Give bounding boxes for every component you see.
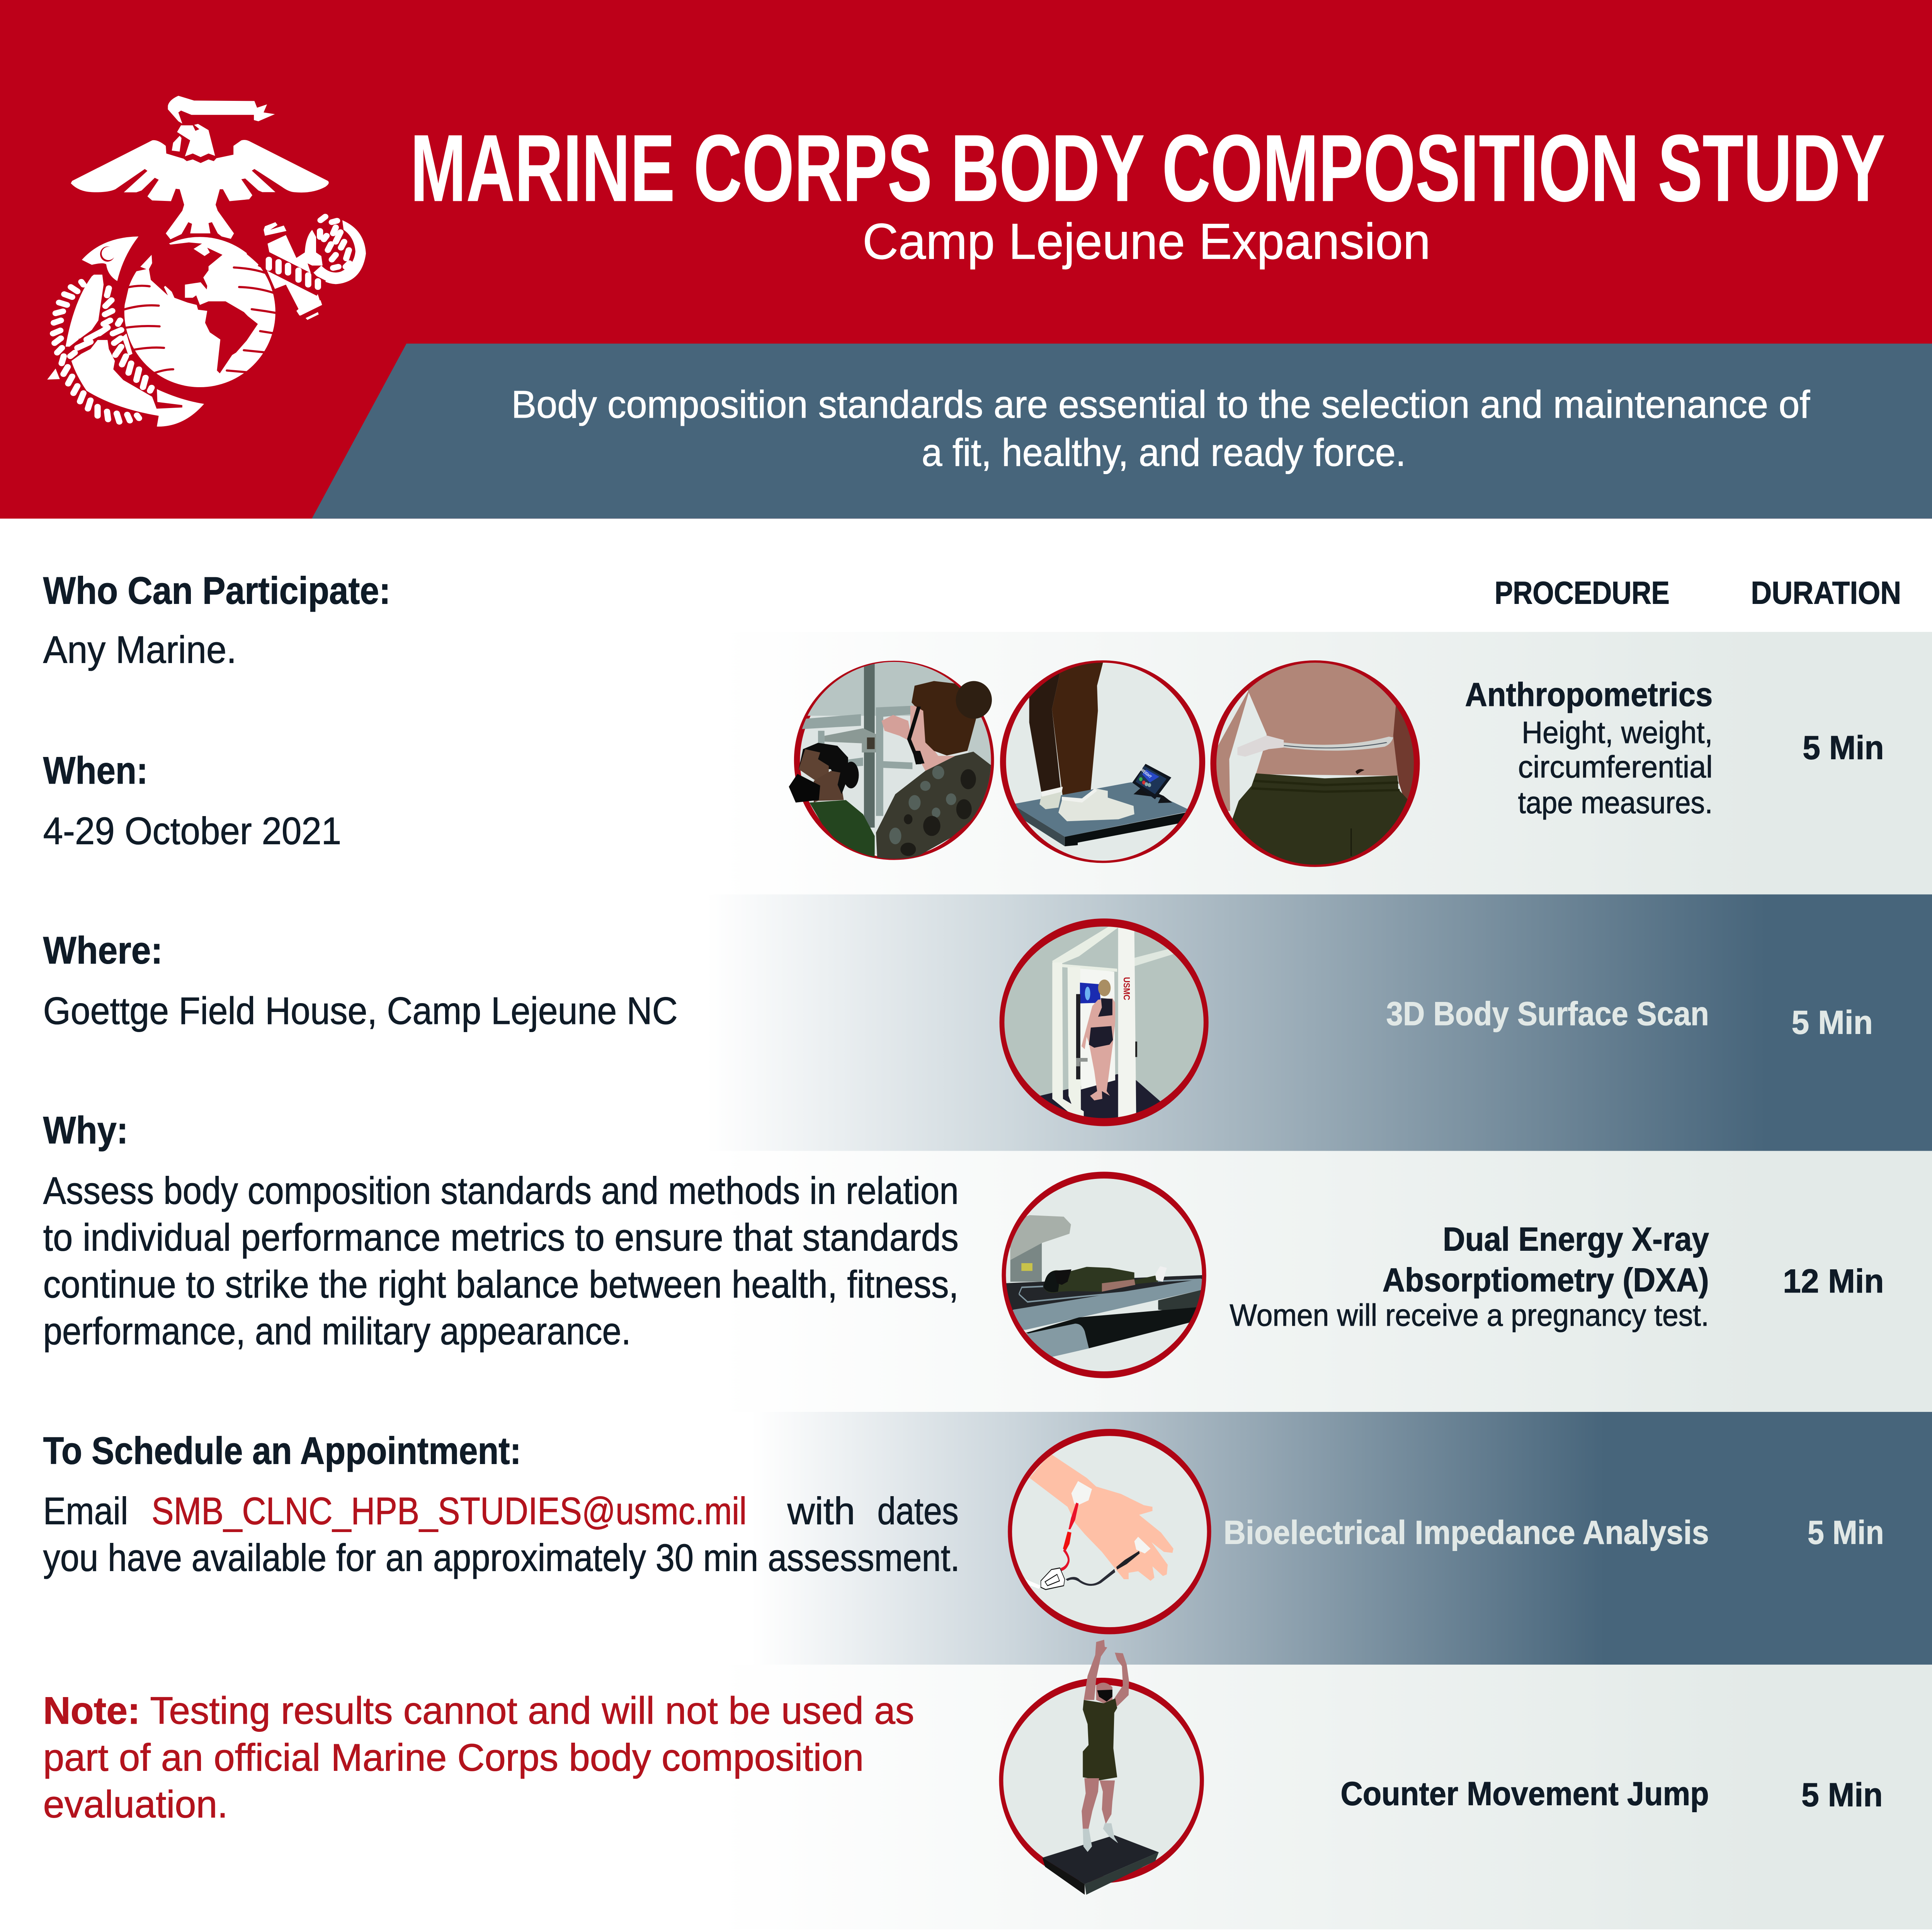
table header: duration: DURATION	[1751, 575, 1901, 611]
when: When:	[43, 749, 148, 792]
appointment scheduling: with	[787, 1490, 855, 1532]
panel: bioelectrical row	[0, 1412, 1932, 1665]
when: 4-29 October 2021	[43, 810, 341, 852]
summary statement: a fit, healthy, and ready force.	[922, 431, 1406, 474]
header background	[0, 0, 1932, 519]
summary statement	[511, 383, 1810, 474]
icon: tape measure photo	[1209, 659, 1419, 872]
panel: jump row	[0, 1665, 1932, 1929]
appointment scheduling	[43, 1429, 960, 1579]
where	[43, 929, 678, 1032]
bioelectrical label: Bioelectrical Impedance Analysis	[1223, 1514, 1709, 1551]
appointment scheduling: To Schedule an Appointment:	[43, 1429, 521, 1472]
bioelectrical duration: 5 Min	[1808, 1514, 1884, 1551]
icon: bioelectrical impedance hand	[1010, 1432, 1209, 1631]
icon: height measurement photo	[789, 661, 994, 859]
table header: procedure: PROCEDURE	[1495, 575, 1670, 611]
appointment scheduling: Email	[43, 1490, 128, 1532]
3D scan duration: 5 Min	[1791, 1004, 1873, 1041]
note: evaluation.	[43, 1783, 228, 1825]
when	[43, 749, 341, 852]
appointment scheduling: SMB_CLNC_HPB_STUDIES@usmc.mil	[151, 1490, 747, 1532]
icon: eagle globe and anchor emblem	[47, 96, 366, 427]
subtitle: Camp Lejeune Expansion	[862, 213, 1430, 270]
panel: DXA row	[0, 1151, 1932, 1412]
who can participate: Who Can Participate:	[43, 569, 391, 612]
why: continue to strike the right balance between health, fitness,	[43, 1263, 959, 1306]
scanner USMC label: USMC	[1122, 977, 1132, 1000]
panel: 3D scan row	[0, 895, 1932, 1151]
anthropometrics text	[1465, 676, 1713, 820]
why: to individual performance metrics to ensure that standards	[43, 1216, 959, 1259]
3D scan label: 3D Body Surface Scan	[1386, 995, 1709, 1032]
jump label: Counter Movement Jump	[1340, 1776, 1709, 1813]
anthropometrics duration: 5 Min	[1803, 729, 1884, 766]
note: Note: Testing results cannot and will not be used as	[43, 1689, 914, 1732]
appointment scheduling: dates	[877, 1490, 959, 1532]
why: Why:	[43, 1109, 128, 1151]
icon: 3D body scanner photo	[1002, 922, 1206, 1122]
panel: anthropometrics row	[0, 632, 1932, 895]
DXA duration: 12 Min	[1783, 1263, 1884, 1300]
anthropometrics text: circumferential	[1518, 750, 1713, 784]
anthropometrics text: Height, weight,	[1522, 715, 1713, 750]
jump duration: 5 Min	[1801, 1777, 1883, 1814]
icon: counter movement jump figure	[1001, 1640, 1202, 1895]
summary statement: Body composition standards are essential to the selection and maintenance of	[511, 383, 1810, 426]
DXA text: Women will receive a pregnancy test.	[1230, 1298, 1709, 1332]
icon: weight scale photo	[1003, 661, 1202, 862]
anthropometrics text: Anthropometrics	[1465, 676, 1713, 713]
why: performance, and military appearance.	[43, 1310, 631, 1352]
DXA text: Absorptiometry (DXA)	[1383, 1262, 1709, 1299]
who can participate	[43, 569, 391, 671]
icon: DXA scanner photo	[1003, 1175, 1207, 1375]
where: Where:	[43, 929, 163, 972]
why: Assess body composition standards and methods in relation	[43, 1169, 959, 1212]
scale display label: WEIGHT	[1139, 768, 1153, 779]
why	[43, 1109, 959, 1352]
DXA text: Dual Energy X-ray	[1443, 1221, 1709, 1258]
DXA text	[1230, 1221, 1709, 1332]
appointment scheduling: you have available for an approximately 30 min assessment.	[43, 1537, 960, 1579]
where: Goettge Field House, Camp Lejeune NC	[43, 990, 678, 1032]
anthropometrics text: tape measures.	[1518, 786, 1713, 820]
note: part of an official Marine Corps body composition	[43, 1736, 864, 1779]
who can participate: Any Marine.	[43, 629, 236, 671]
note	[43, 1689, 914, 1825]
panel: summary band	[312, 344, 1932, 519]
